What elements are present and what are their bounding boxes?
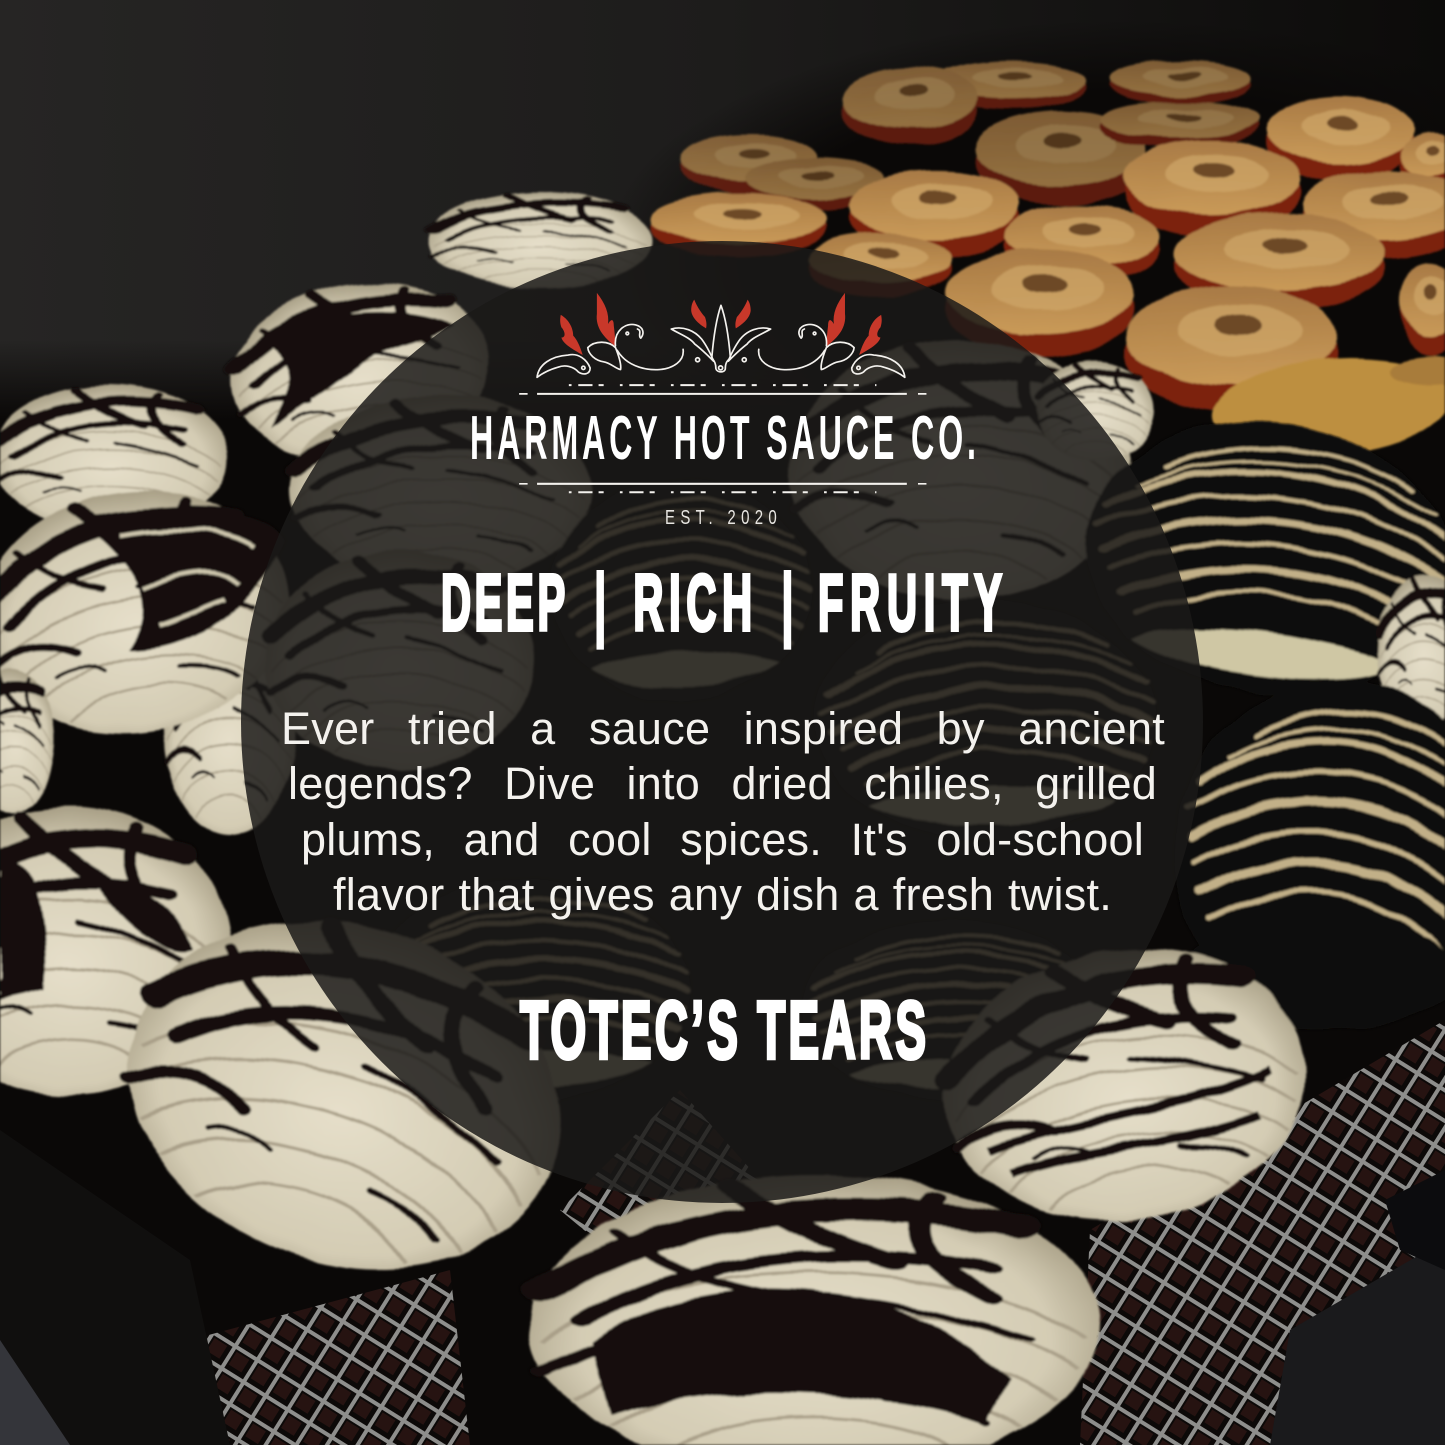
logo rules above name (519, 385, 926, 394)
plums (650, 61, 1445, 466)
flavor headline: DEEP (441, 557, 569, 648)
brand name: HARMACY HOT SAUCE CO. (470, 404, 976, 473)
logo ornament: chilies and flourishes (537, 293, 905, 377)
grill mesh (0, 1020, 1445, 1445)
flavor headline: RICH (633, 557, 758, 648)
sauce name: TOTEC’S TEARS (520, 985, 926, 1077)
logo rules below name (519, 484, 926, 492)
description text: Ever tried a sauce inspired by ancient (281, 703, 1165, 754)
description text: legends? Dive into dried chilies, grilled (288, 758, 1157, 809)
description text (281, 703, 1165, 920)
flavor headline: | (782, 557, 793, 648)
flavor headline: FRUITY (818, 557, 1009, 648)
dark circle overlay (241, 241, 1203, 1203)
description text: flavor that gives any dish a fresh twist. (333, 869, 1112, 920)
description text: plums, and cool spices. It's old-school (301, 814, 1144, 865)
established date: EST. 2020 (665, 506, 777, 529)
flavor headline: | (594, 557, 606, 648)
